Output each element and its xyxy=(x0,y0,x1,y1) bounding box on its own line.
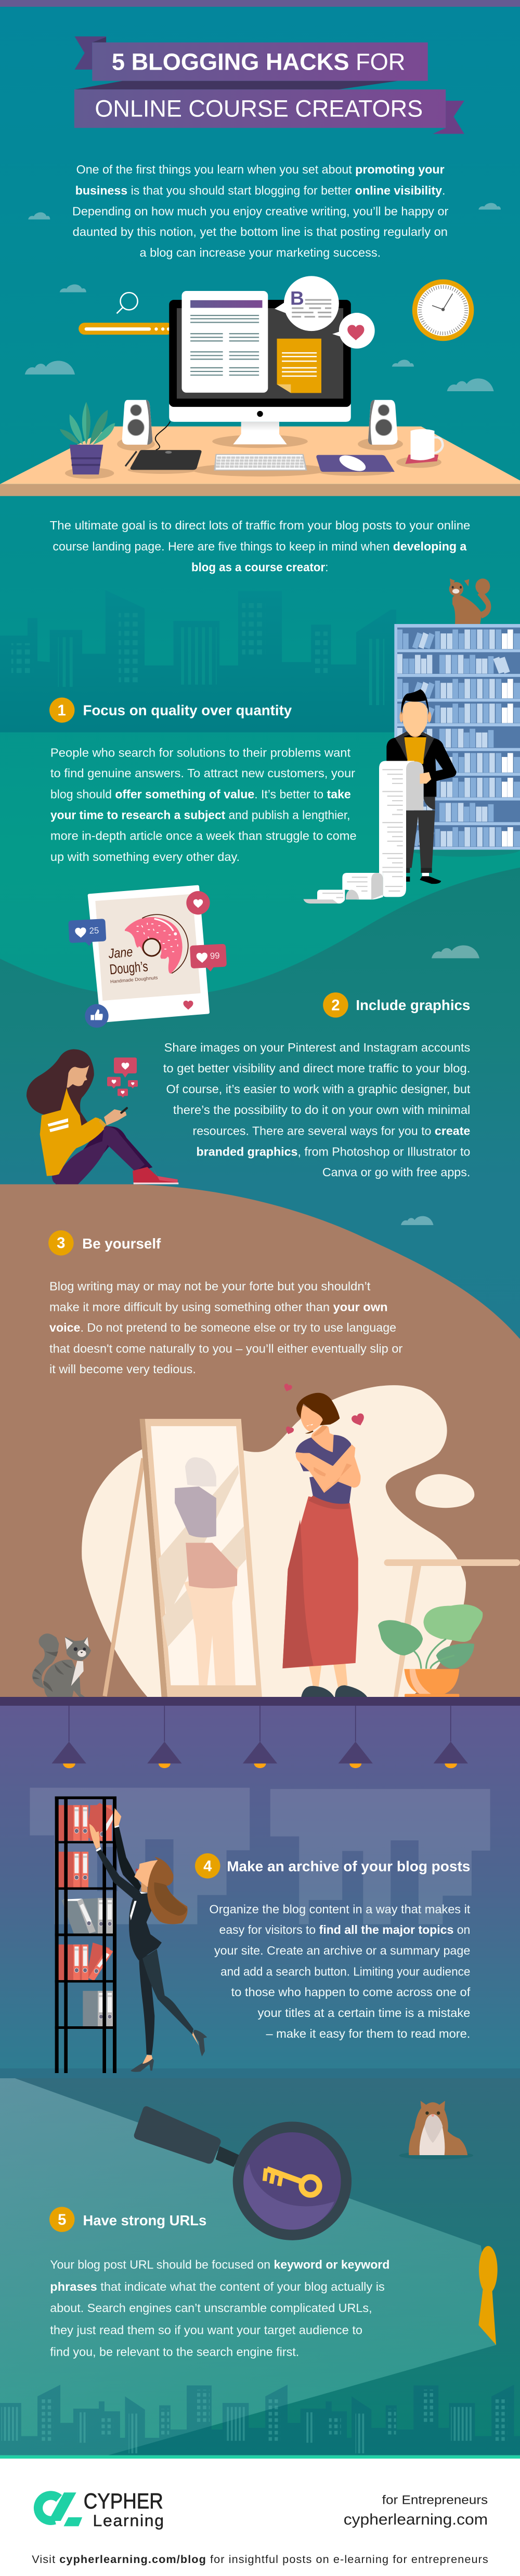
monitor xyxy=(169,300,351,444)
woman hugging herself xyxy=(283,1383,367,1509)
tip 1 body xyxy=(50,746,357,864)
city skyline xyxy=(0,2385,520,2455)
hanging lamps xyxy=(51,1706,468,1768)
tip 2 body: to get better visibility and direct more traffic to your blog. xyxy=(163,1061,470,1075)
green divider xyxy=(0,2455,520,2459)
woman xyxy=(89,1808,207,2072)
girl figure xyxy=(40,1065,178,1184)
count bubble 99: 99 xyxy=(210,950,220,961)
cloud: right of hill xyxy=(432,945,479,958)
count bubble 25: 25 xyxy=(89,925,99,936)
paper scroll xyxy=(303,761,431,904)
tip 4 body xyxy=(209,1902,471,2040)
bookshelf xyxy=(394,624,520,857)
intro paragraph: daunted by this notion, yet the bottom line is that posting regularly on xyxy=(73,225,448,238)
intro paragraph 2 xyxy=(50,519,470,574)
intro paragraph 2: The ultimate goal is to direct lots of traffic from your blog posts to your online xyxy=(50,519,470,532)
tip 2 body: Of course, it’s easier to work with a graphic designer, but xyxy=(166,1082,471,1096)
desk shadows xyxy=(65,435,441,479)
tip 5 body: phrases that indicate what the content of your blog actually is xyxy=(50,2280,385,2293)
section background xyxy=(0,2078,520,2455)
icon: wall clock xyxy=(412,280,474,341)
title line 2: ONLINE COURSE CREATORS xyxy=(95,95,423,122)
clouds xyxy=(25,203,501,391)
doughnut logo: Jane xyxy=(108,944,133,961)
keyboard xyxy=(214,454,307,471)
tip 5 body xyxy=(50,2258,389,2358)
tip 5 badge: 5 xyxy=(58,2211,66,2228)
tip 3 body: Blog writing may or may not be your forte but you shouldn’t xyxy=(49,1279,371,1293)
tip 1 body: blog should offer something of value. It’s better to take xyxy=(50,787,351,801)
wave hill xyxy=(0,868,520,1351)
tip 5 badge xyxy=(49,2207,74,2232)
footer right text xyxy=(344,2493,488,2528)
speech bubble: blog: B xyxy=(290,288,304,309)
photo frame xyxy=(89,887,208,1021)
footer call to action: Visit cypherlearning.com/blog for insightful posts on e-learning for entrepreneurs xyxy=(32,2553,488,2566)
tip 5 body: they just read them so if you want your target audience to xyxy=(50,2323,362,2336)
speakers xyxy=(122,400,398,445)
doughnut logo: Dough’s xyxy=(109,958,149,977)
panel: header and hero desk scene xyxy=(0,36,520,496)
intro paragraph 2: course landing page. Here are five things to keep in mind when developing a xyxy=(53,539,467,553)
keyhole xyxy=(478,2246,498,2345)
tip 1 body: more in-depth article once a week than struggle to come xyxy=(50,829,357,843)
page background xyxy=(0,0,520,1351)
title ribbon xyxy=(74,36,464,134)
footer right text: cypherlearning.com xyxy=(344,2511,488,2528)
girl with phone xyxy=(27,1049,178,1184)
intro paragraph 2: blog as a course creator: xyxy=(191,560,328,574)
tip 4 heading: Make an archive of your blog posts xyxy=(227,1858,470,1874)
tip 3 body: voice. Do not pretend to be someone else or try to use language xyxy=(49,1321,396,1334)
tip 2 heading group xyxy=(323,992,470,1018)
logo: Learning xyxy=(93,2511,164,2530)
tip 1 body: People who search for solutions to their problems want xyxy=(50,746,351,760)
metal shelf xyxy=(55,1796,116,2073)
spotlight beam xyxy=(0,2078,496,2455)
shelf and woman reaching for folder xyxy=(55,1796,207,2073)
tip 2 body: branded graphics, from Photoshop or Illustrator to xyxy=(197,1145,470,1158)
tip 2 heading: Include graphics xyxy=(356,997,470,1013)
tip 5 heading: Have strong URLs xyxy=(83,2212,206,2228)
tip 3 body xyxy=(49,1279,403,1376)
folders xyxy=(58,1803,117,2026)
tip 4 body: your site. Create an archive or a summary page xyxy=(214,1944,470,1957)
intro paragraph: One of the first things you learn when you set about promoting your xyxy=(76,163,445,176)
tip 1 body: up with something every other day. xyxy=(50,850,240,864)
woman upper body xyxy=(295,1393,360,1509)
tip 3 body: that doesn't come naturally to you – you’ll either eventually slip or xyxy=(49,1342,403,1355)
logo xyxy=(38,2489,164,2530)
small heart xyxy=(183,1001,193,1010)
intro paragraph: business is that you should start blogging for better online visibility. xyxy=(75,183,446,197)
mouse and pad xyxy=(316,452,395,474)
footer background xyxy=(0,2459,520,2576)
tip 4 body: your titles at a certain time is a mistake xyxy=(258,2006,470,2020)
magnifying glass with key xyxy=(134,2106,352,2240)
brown cat on shelf xyxy=(449,578,490,624)
tip 3 badge: 3 xyxy=(57,1234,66,1252)
tip 1 heading: Focus on quality over quantity xyxy=(83,702,292,718)
inverted city xyxy=(30,1788,490,1924)
potted plant xyxy=(60,402,115,474)
tip 4 body: easy for visitors to find all the major topics on xyxy=(219,1923,470,1936)
tip 4 badge xyxy=(195,1853,220,1878)
intro paragraph: a blog can increase your marketing success. xyxy=(139,246,381,259)
tip 2 badge xyxy=(323,992,348,1018)
intro paragraph: Depending on how much you enjoy creative writing, you’ll be happy or xyxy=(72,205,449,218)
brown ground xyxy=(0,1184,520,1697)
city silhouette xyxy=(0,590,396,732)
table and plant xyxy=(378,1559,520,1697)
gray cat xyxy=(32,1634,91,1702)
tip 2 body: Canva or go with free apps. xyxy=(322,1165,470,1179)
intro paragraph xyxy=(72,163,449,259)
tip 4 body: and add a search button. Limiting your audience xyxy=(220,1964,470,1978)
tip 1 body: to find genuine answers. To attract new customers, your xyxy=(50,766,355,780)
search bar xyxy=(79,323,173,335)
panel: tip 4 xyxy=(30,1706,490,2040)
tip 5 body: find you, be relevant to the search engine first. xyxy=(50,2345,299,2358)
speech bubble: heart xyxy=(332,313,375,349)
panel: tip 3 xyxy=(0,1184,520,1697)
persian cat xyxy=(399,2101,473,2159)
tip 4 body: Organize the blog content in a way that makes it xyxy=(209,1902,471,1916)
tip 3 badge xyxy=(48,1230,74,1255)
count bubble 25 xyxy=(68,919,107,947)
tip 2 body xyxy=(163,1041,471,1179)
icon: magnifier xyxy=(116,293,138,313)
thumbs up badge xyxy=(85,1004,109,1028)
girl hair xyxy=(27,1049,94,1127)
man xyxy=(386,689,457,884)
woman skirt and feet xyxy=(282,1496,368,1697)
tip 2 body: resources. There are several ways for you to create xyxy=(193,1124,470,1137)
tip 4 body: to those who happen to come across one of xyxy=(231,1985,471,1999)
speech bubble: blog xyxy=(275,276,339,331)
tip 2 body: Share images on your Pinterest and Instagram accounts xyxy=(164,1041,470,1054)
tip 2 body: there’s the possibility to do it on your own with minimal xyxy=(173,1103,470,1117)
floor and tip 4 section background xyxy=(0,1697,520,2078)
tip 3 body: it will become very tedious. xyxy=(49,1362,196,1376)
tip 5 section xyxy=(0,2078,520,2576)
doughnut logo xyxy=(95,894,201,1001)
sticky note xyxy=(277,339,321,393)
photo card with doughnut logo xyxy=(68,887,227,1028)
tip 2 badge: 2 xyxy=(331,997,340,1014)
drawing tablet xyxy=(125,421,202,470)
tip 1 body: your time to research a subject and publish a lengthier, xyxy=(50,808,350,822)
tip 3 body: make it more difficult by using something other than your own xyxy=(49,1300,388,1314)
tip 3 heading: Be yourself xyxy=(82,1236,161,1252)
hearts xyxy=(283,1383,367,1436)
mirror xyxy=(105,1419,262,1697)
cream blob xyxy=(82,1385,466,1697)
doughnut logo: Handmade Doughnuts xyxy=(110,975,158,984)
count bubble 99 xyxy=(190,944,227,973)
tip 4 body: – make it easy for them to read more. xyxy=(266,2027,470,2040)
cream island xyxy=(415,1474,474,1508)
tip 4 badge: 4 xyxy=(203,1857,212,1875)
title line 1: 5 BLOGGING HACKS FOR xyxy=(112,49,405,75)
desk xyxy=(0,427,520,496)
tip 5 body: about. Search engines can’t unscramble complicated URLs, xyxy=(50,2301,372,2315)
like badge xyxy=(186,891,210,914)
panel: man with receipt and bookshelf xyxy=(303,578,520,904)
tip 1 badge xyxy=(49,697,74,723)
heart bubbles xyxy=(107,1057,138,1098)
logo: CYPHER xyxy=(84,2489,163,2513)
footer right text: for Entrepreneurs xyxy=(382,2493,488,2507)
panel: intro 2 and tip 1 xyxy=(0,519,470,864)
coffee cup xyxy=(405,429,443,464)
tip 1 badge: 1 xyxy=(57,702,66,719)
tip 5 body: Your blog post URL should be focused on keyword or keyword xyxy=(50,2258,389,2272)
document on screen xyxy=(181,291,268,393)
cloud xyxy=(401,1216,434,1225)
